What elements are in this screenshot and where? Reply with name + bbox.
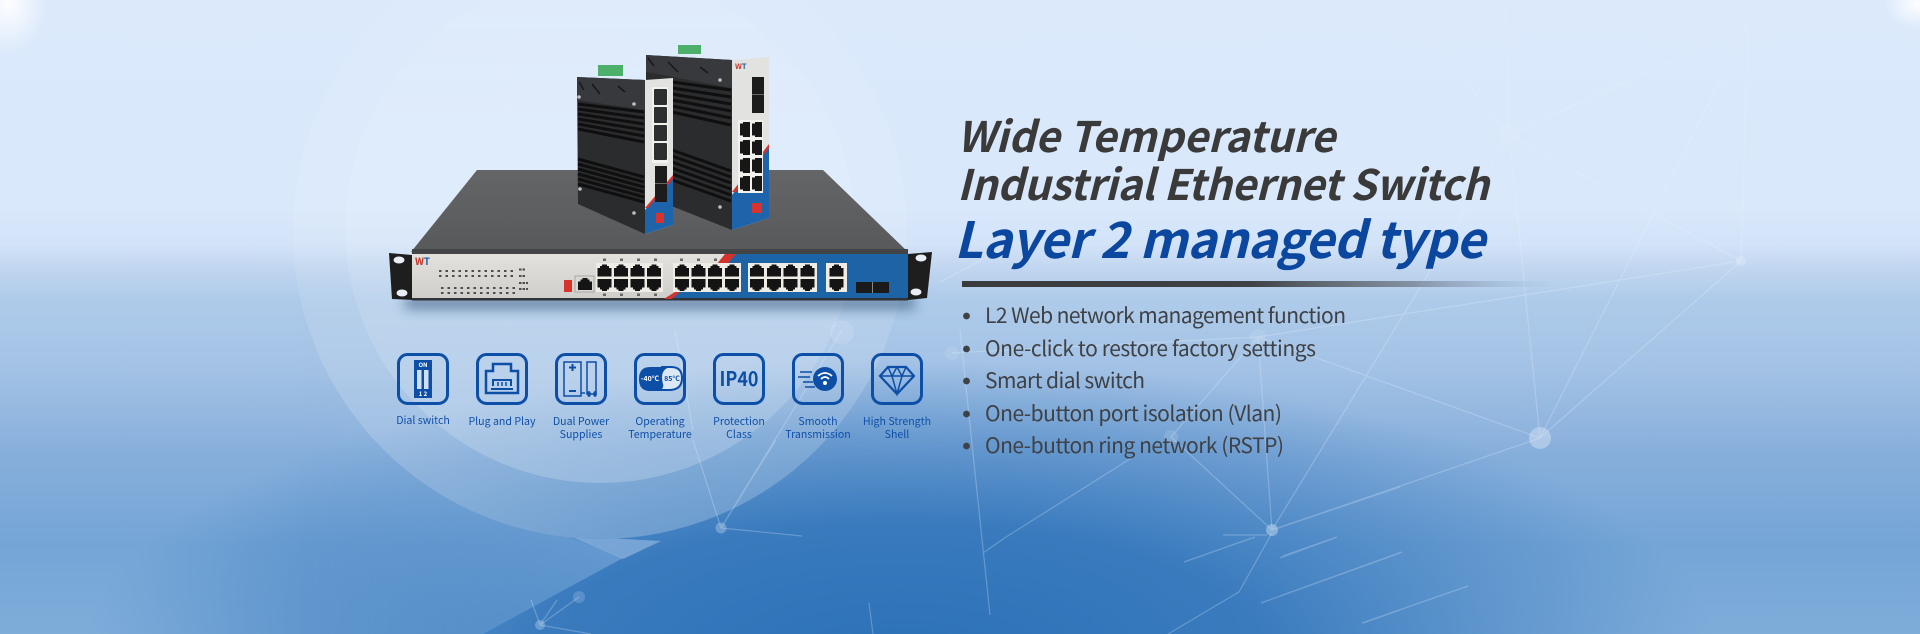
label: dual power supplies	[553, 414, 610, 442]
label: smooth transmission: Transmission	[785, 427, 851, 442]
bullet 3: Smart dial switch	[985, 365, 1145, 395]
bullet 1: L2 Web network management function	[985, 300, 1346, 330]
product: tall DIN rail switch	[646, 45, 769, 230]
dip switch	[564, 280, 572, 292]
label: operating temperature	[628, 414, 692, 442]
concentric circles behind product	[304, 252, 895, 634]
divider rule	[962, 281, 1562, 287]
tall switch top diagonal marks	[648, 58, 708, 73]
label: operating temperature: Operating	[635, 414, 685, 429]
short switch screws	[577, 95, 636, 215]
green terminal	[598, 65, 623, 76]
bullet 5: One-button ring network (RSTP)	[985, 430, 1284, 460]
icon: operating temperature: 85°C	[664, 374, 680, 384]
shadow under rack switch	[405, 297, 915, 309]
bullet 2: One-click to restore factory settings	[985, 333, 1316, 363]
label: smooth transmission	[785, 414, 851, 442]
label: high strength shell: High Strength	[863, 414, 931, 429]
label: plug and play: Plug and Play	[468, 414, 536, 429]
tall switch body	[646, 55, 732, 230]
icon: dial switch: ON	[418, 360, 428, 369]
product: rack switch	[389, 170, 932, 309]
title block	[954, 104, 1492, 273]
icon: operating temperature: -40°C	[641, 374, 660, 384]
label: high strength shell	[863, 414, 931, 442]
icon: high strength shell	[872, 354, 922, 404]
icon: operating temperature	[636, 354, 684, 404]
icon: plug and play	[478, 354, 526, 404]
short switch front face	[645, 78, 673, 234]
feature bullet list	[963, 300, 1346, 460]
rack switch top plate	[411, 170, 908, 252]
label: protection class: Class	[726, 427, 752, 442]
SFP ports	[856, 282, 889, 293]
tall switch RJ45 block	[738, 120, 763, 193]
short switch fins	[578, 104, 644, 202]
green terminal	[678, 45, 701, 54]
tall switch screws	[718, 78, 722, 209]
feature icons row	[396, 354, 931, 442]
port group 2	[673, 263, 741, 292]
product: short DIN rail switch	[577, 65, 673, 234]
short switch body	[577, 77, 645, 234]
tall switch front face	[732, 57, 769, 230]
label: protection class: Protection	[713, 414, 765, 429]
title line 2: Industrial Ethernet Switch	[957, 152, 1492, 213]
label: high strength shell: Shell	[885, 427, 909, 442]
short switch SFP ports	[655, 166, 667, 202]
port group 3	[748, 263, 817, 292]
short switch top diagonal marks	[579, 82, 625, 94]
tall switch fins	[672, 82, 731, 201]
icon: IP40 protection class	[714, 354, 764, 404]
front panel	[412, 254, 908, 299]
port group 1	[596, 263, 663, 292]
network nodes	[535, 15, 1759, 630]
icon: IP40 protection class: IP40	[720, 363, 758, 392]
status LEDs	[439, 270, 528, 293]
label: dual power supplies: Dual Power	[553, 414, 610, 429]
icon: smooth transmission	[794, 354, 842, 404]
short switch dip	[656, 213, 664, 223]
port indicator dots	[603, 258, 717, 296]
product: tall DIN rail switch: WT	[735, 61, 747, 72]
title line 1: Wide Temperature	[957, 104, 1339, 165]
icon: dial switch: 1 2	[419, 389, 428, 398]
icon: dual power supplies	[556, 354, 606, 404]
network mesh lines	[531, 0, 1748, 634]
port group 4	[826, 263, 847, 292]
tall switch SFP ports	[752, 77, 764, 113]
rack ears	[389, 252, 932, 300]
label: operating temperature: Temperature	[628, 427, 692, 442]
label: smooth transmission: Smooth	[798, 414, 838, 429]
console port	[575, 276, 594, 292]
icon: dial switch	[398, 354, 448, 404]
bullet 4: One-button port isolation (Vlan)	[985, 398, 1282, 428]
short switch RJ45 ports	[652, 87, 668, 163]
label: dial switch: Dial switch	[396, 413, 450, 428]
label: dual power supplies: Supplies	[560, 427, 602, 442]
label: protection class	[713, 414, 765, 442]
subtitle: Layer 2 managed type	[954, 201, 1489, 273]
brand logo: WT	[415, 253, 430, 268]
tall switch dip	[752, 203, 762, 213]
